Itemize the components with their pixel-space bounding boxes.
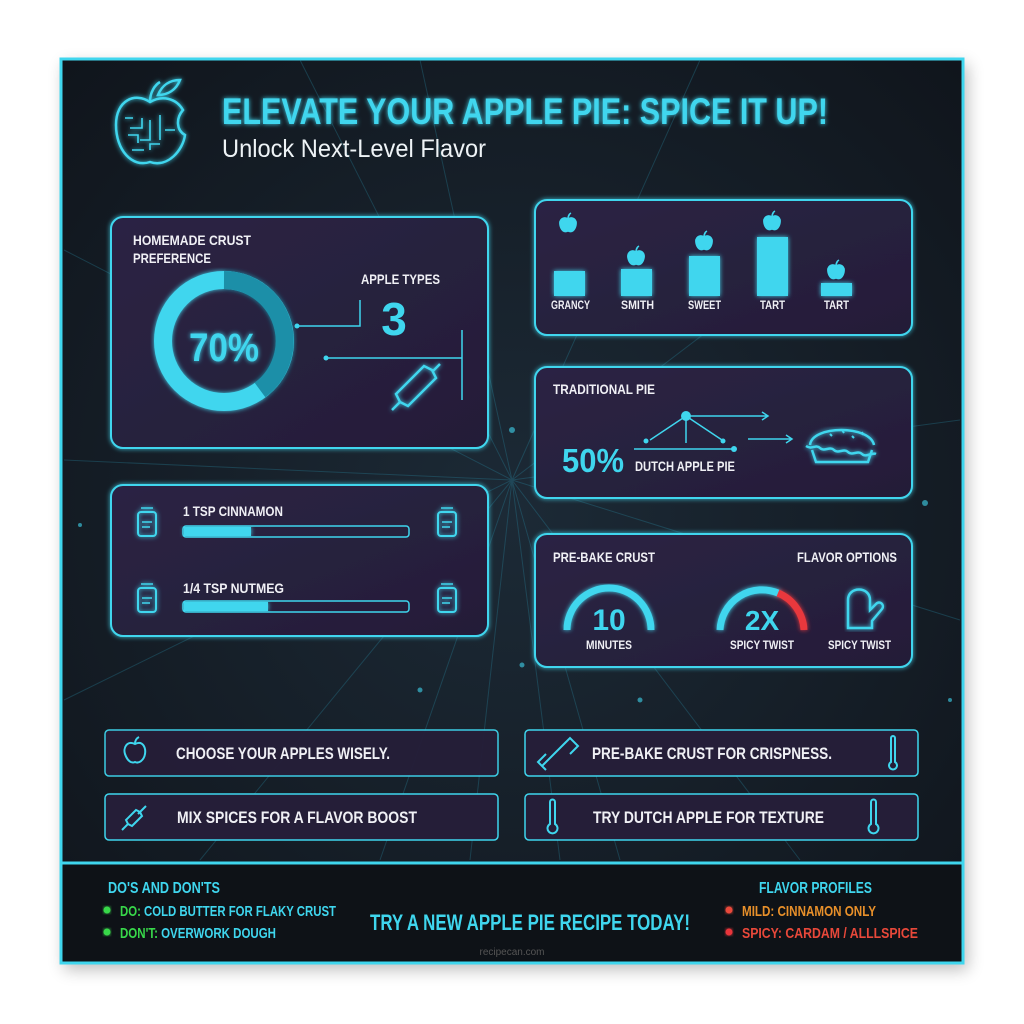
- panel: crust preference: [111, 217, 488, 448]
- tip: dutch apple: TRY DUTCH APPLE FOR TEXTURE: [593, 808, 824, 827]
- tip: mix spices: MIX SPICES FOR A FLAVOR BOOST: [177, 808, 417, 827]
- donut chart: 70%: [189, 326, 259, 370]
- footer: SPICY: CARDAM / ALLLSPICE: [742, 925, 918, 942]
- panel: apple types bars: [535, 200, 912, 335]
- panel: pre-bake crust: MINUTES: [586, 638, 632, 652]
- panel: apple types bars: SWEET: [688, 298, 722, 312]
- panel: crust preference: HOMEMADE CRUST: [133, 232, 251, 248]
- icon: oven mitt: [848, 590, 883, 628]
- panel: pre-bake crust: [535, 534, 912, 667]
- panel: pre-bake crust: PRE-BAKE CRUST: [553, 549, 655, 565]
- panel: crust preference: PREFERENCE: [133, 250, 211, 266]
- panel: spices: 1 TSP CINNAMON: [183, 503, 283, 519]
- panel: apple types bars: TART: [760, 298, 786, 312]
- subtitle: Unlock Next-Level Flavor: [222, 135, 486, 163]
- panel: apple types bars: GRANCY: [551, 298, 590, 312]
- tip: mix spices: [105, 794, 498, 840]
- title: ELEVATE YOUR APPLE PIE: SPICE IT UP!: [222, 91, 828, 132]
- footer: FLAVOR PROFILES: [759, 880, 872, 897]
- tip: pre-bake: [525, 730, 918, 776]
- panel: traditional pie: 50%: [562, 442, 624, 479]
- footer: TRY A NEW APPLE PIE RECIPE TODAY!: [370, 910, 690, 935]
- panel: traditional pie: TRADITIONAL PIE: [553, 381, 655, 397]
- tip: choose apples: CHOOSE YOUR APPLES WISELY.: [176, 744, 390, 763]
- panel: pre-bake crust: SPICY TWIST: [828, 638, 892, 652]
- panel: pre-bake crust: 2X: [745, 605, 779, 636]
- panel: apple types bars: TART: [824, 298, 850, 312]
- tip: choose apples: [105, 730, 498, 776]
- icon: rolling pin: [392, 364, 440, 410]
- tip: pre-bake: PRE-BAKE CRUST FOR CRISPNESS.: [592, 744, 832, 763]
- panel: pre-bake crust: 10: [592, 604, 626, 637]
- panel: pre-bake crust: FLAVOR OPTIONS: [797, 549, 897, 565]
- frame: [61, 59, 963, 963]
- icon: circuit apple: [116, 80, 185, 163]
- footer: recipecan.com: [479, 947, 545, 958]
- panel: crust preference: 3: [381, 293, 407, 345]
- panel: apple types bars: SMITH: [621, 298, 654, 312]
- panel: spices: 1/4 TSP NUTMEG: [183, 580, 284, 596]
- tip: dutch apple: [525, 794, 918, 840]
- footer: DON'T: OVERWORK DOUGH: [120, 925, 276, 942]
- panel: pre-bake crust: SPICY TWIST: [730, 638, 795, 652]
- footer: MILD: CINNAMON ONLY: [742, 903, 876, 920]
- panel: crust preference: APPLE TYPES: [361, 271, 440, 287]
- donut chart: [163, 280, 285, 402]
- panel: traditional pie: DUTCH APPLE PIE: [635, 458, 735, 474]
- panel: spices: [111, 485, 488, 636]
- footer: DO'S AND DON'TS: [108, 880, 220, 897]
- icon: pie: [806, 430, 876, 462]
- panel: traditional pie: [535, 367, 912, 498]
- footer: [61, 863, 963, 963]
- footer: DO: COLD BUTTER FOR FLAKY CRUST: [120, 903, 336, 920]
